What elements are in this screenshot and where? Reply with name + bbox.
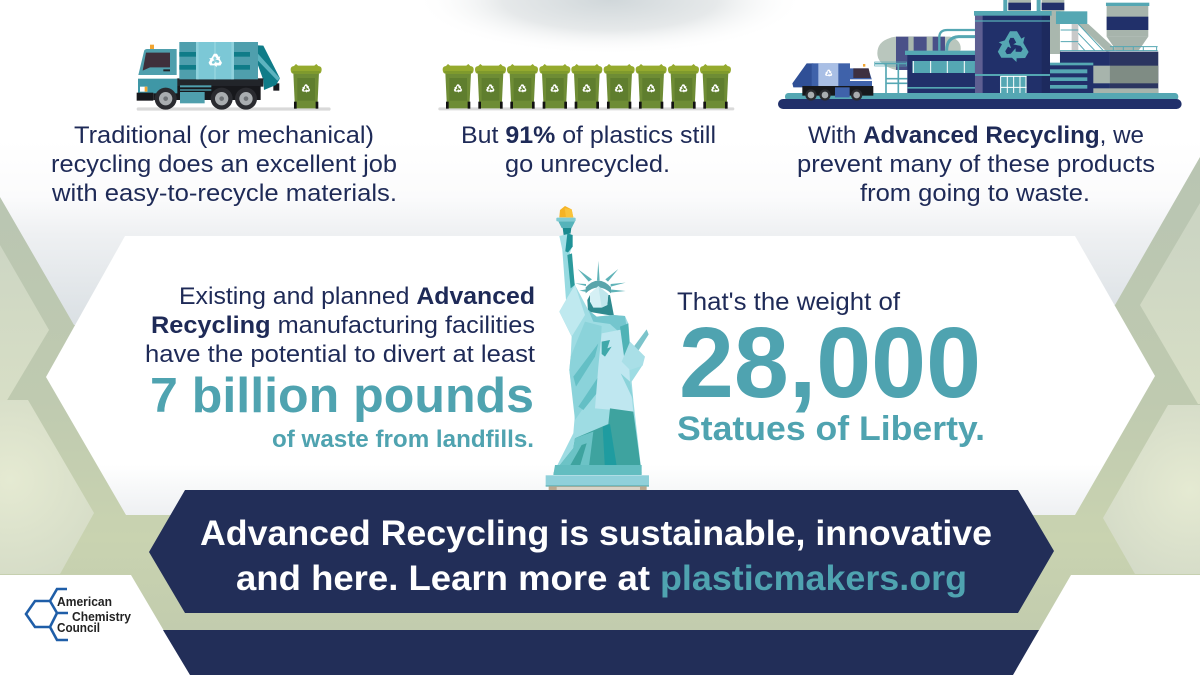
text: traditional recycling: recycling does an excellent job (51, 151, 397, 178)
illustration: Statue of Liberty (546, 206, 649, 490)
text: facilities potential (145, 283, 535, 368)
text: 91 percent unrecycled: go unrecycled. (505, 151, 670, 178)
stat: 28,000: 28,000 (679, 307, 981, 419)
icon: garbage truck and bin (137, 42, 331, 111)
text: facilities potential: have the potential to divert at least (145, 341, 535, 368)
text: 91 percent unrecycled: But 91% of plastics still (461, 122, 716, 149)
text: statues of liberty: Statues of Liberty. (677, 410, 985, 448)
light hexagon: lower right (1103, 405, 1200, 574)
light hexagon: upper left (0, 245, 49, 412)
text: of waste from landfills: of waste from landfills. (272, 426, 534, 453)
banner link: plasticmakers.org (660, 559, 967, 598)
logo: American Chemistry Council: American (57, 595, 112, 609)
text: traditional recycling: with easy-to-recycle materials. (51, 180, 397, 207)
logo: American Chemistry Council (26, 589, 131, 640)
text: facilities potential: Recycling manufacturing facilities (151, 312, 535, 339)
logo: American Chemistry Council: Chemistry (72, 610, 131, 624)
banner text line 2: and here. Learn more at (236, 559, 650, 598)
text: traditional recycling: Traditional (or mechanical) (74, 122, 374, 149)
text: facilities potential: Existing and planned Advanced (179, 283, 535, 310)
text: advanced recycling prevents waste: prevent many of these products (797, 151, 1155, 178)
bottom right white corner (1013, 575, 1200, 675)
top white area (0, 0, 1200, 325)
icon: recycling factory with truck (778, 0, 1182, 109)
text: advanced recycling prevents waste: With Advanced Recycling, we (808, 122, 1144, 149)
text: advanced recycling prevents waste (797, 122, 1155, 207)
icon: row of nine green bins (438, 64, 734, 110)
bottom navy band (163, 630, 1039, 675)
top shadow (415, 0, 805, 55)
text: that's the weight of: That's the weight of (677, 288, 900, 316)
stat: 7 billion pounds: 7 billion pounds (150, 369, 534, 423)
logo: American Chemistry Council: Council (57, 621, 100, 635)
text: 91 percent unrecycled (461, 122, 716, 178)
banner: call to action (149, 490, 1054, 613)
text: traditional recycling (51, 122, 397, 207)
central white hexagon panel (46, 236, 1155, 515)
banner text line 1: Advanced Recycling is sustainable, innovative (200, 514, 992, 553)
bottom left white corner (0, 575, 190, 675)
light hexagon: upper right (1140, 203, 1200, 404)
light hexagon: lower left (0, 400, 94, 574)
text: advanced recycling prevents waste: from going to waste. (860, 180, 1090, 207)
green hexagon field (0, 150, 1200, 640)
